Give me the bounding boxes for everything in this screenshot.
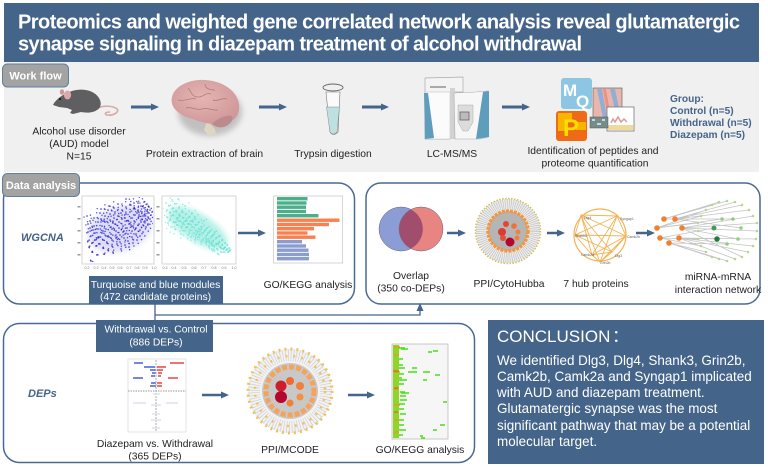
label: PPI/MCODE: PPI/MCODE xyxy=(261,445,319,456)
work flow tag: Work flow xyxy=(9,70,62,82)
icon: MaxQuant xyxy=(561,78,592,111)
chart: blue module scatter: 0.4 xyxy=(102,266,106,270)
icon: small charts xyxy=(590,107,634,131)
label: LC-MS/MS: LC-MS/MS xyxy=(427,149,477,160)
arrow xyxy=(131,106,156,108)
label: overlap: (350 co-DEPs) xyxy=(377,284,445,294)
icon: heatmap xyxy=(593,88,622,119)
text: conclusion body: Camk2b, Camk2a and Syngap1 implicated xyxy=(497,369,752,384)
connector to overlap panel xyxy=(155,304,420,320)
chart: turquoise module scatter: 0.8 xyxy=(212,266,216,270)
heading: WGCNA: WGCNA xyxy=(21,232,64,244)
chart: blue module scatter: 0.6 xyxy=(118,266,122,270)
label: miRNA-mRNA network xyxy=(675,272,762,296)
icon: MaxQuant: M xyxy=(563,81,577,100)
arrow xyxy=(447,232,463,234)
work flow tag xyxy=(2,64,68,87)
panel: WGCNA xyxy=(4,183,354,304)
chart: blue module scatter: 0.7 xyxy=(126,266,132,270)
chart: PPI network xyxy=(476,198,540,264)
chart: blue module scatter: 0.3 xyxy=(94,266,98,270)
label: GO/KEGG analysis: GO/KEGG analysis xyxy=(376,445,464,456)
chart: turquoise module scatter xyxy=(158,194,236,270)
icon: MaxQuant: Q xyxy=(576,92,589,111)
icon: mouse xyxy=(53,89,118,115)
arrow xyxy=(348,394,372,396)
callout: turquoise and blue modules: (472 candidate proteins) xyxy=(100,292,211,303)
label: GO/KEGG analysis: GO/KEGG analysis xyxy=(264,280,352,291)
chart: turquoise module scatter: 0.5 xyxy=(182,266,186,270)
icon: proteomics software collage xyxy=(556,78,634,142)
chart: hub proteins network: Camk2b xyxy=(627,235,640,239)
chart: blue module scatter xyxy=(79,193,158,270)
group legend: Withdrawal (n=5) xyxy=(670,118,752,129)
icon: Venn diagram xyxy=(379,207,443,251)
chart: hub proteins network xyxy=(574,209,640,265)
arrow xyxy=(547,232,562,234)
arrow xyxy=(362,106,386,108)
chart: hub proteins network: Syngap1 xyxy=(620,217,634,221)
title banner xyxy=(4,3,759,62)
data analysis tag: Data analysis xyxy=(6,180,76,192)
label: overlap: Overlap xyxy=(393,271,429,282)
chart: blue module scatter: 1.0 xyxy=(152,266,156,270)
label: AUD model xyxy=(32,126,126,162)
arrow xyxy=(502,106,527,108)
chart: GO/KEGG heatmap xyxy=(392,344,448,439)
label: Diazepam vs Withdrawal: Diazepam vs. Withdrawal xyxy=(97,439,213,450)
group legend: Group: xyxy=(670,94,704,105)
arrow xyxy=(636,232,652,234)
text: conclusion body: We identified Dlg3, Dlg4, Shank3, Grin2b, xyxy=(497,353,745,368)
chart: volcano plot xyxy=(128,359,186,432)
heading: conclusion: ： xyxy=(612,327,629,346)
chart: hub proteins network: Grin2b xyxy=(600,261,611,265)
callout: turquoise and blue modules xyxy=(89,276,223,304)
group legend: Control (n=5) xyxy=(670,106,734,117)
chart: hub proteins network: Camk2a xyxy=(581,253,594,257)
text: conclusion body: significant pathway that may be a potential xyxy=(497,418,750,433)
label: Withdrawal box: Withdrawal vs. Control xyxy=(104,324,208,336)
title banner: Proteomics and weighted gene correlated network analysis reveal glutamatergic xyxy=(18,12,740,34)
chart: hub proteins network: Dlg3 xyxy=(615,254,622,258)
panel: work flow xyxy=(2,62,759,172)
chart: blue module scatter: 0.8 xyxy=(134,266,140,270)
data analysis tag xyxy=(2,174,80,196)
arrow xyxy=(238,232,263,234)
chart: hub proteins network: Shank3 xyxy=(575,234,587,238)
icon: brain xyxy=(172,80,242,136)
chart: miRNA-mRNA network xyxy=(654,201,757,261)
icon: Perseus: P xyxy=(563,115,579,142)
chart: blue module scatter: 0.9 xyxy=(142,266,148,270)
chart: turquoise module scatter: 0.9 xyxy=(222,266,226,270)
arrow xyxy=(202,394,226,396)
chart: blue module scatter: 0.5 xyxy=(110,266,114,270)
group legend: Diazepam (n=5) xyxy=(670,130,745,141)
chart: turquoise module scatter: 0.4 xyxy=(172,266,176,270)
label: miRNA-mRNA network: miRNA-mRNA xyxy=(685,272,751,283)
chart: turquoise module scatter: 1.0 xyxy=(232,266,236,270)
chart: GO/KEGG bars xyxy=(274,196,342,263)
label: Withdrawal box: (886 DEPs) xyxy=(129,338,183,348)
chart: turquoise module scatter: 0.3 xyxy=(162,266,168,270)
heading: DEPs: DEPs xyxy=(28,388,57,400)
chart: PPI/MCODE network xyxy=(248,349,332,433)
icon: mass spectrometer xyxy=(424,77,489,139)
text: conclusion body: molecular target. xyxy=(497,434,597,449)
label: overlap xyxy=(377,271,445,294)
label: Diazepam vs Withdrawal: (365 DEPs) xyxy=(128,452,182,462)
label: miRNA-mRNA network: interaction network xyxy=(675,285,762,296)
panel: DEPs xyxy=(4,320,474,462)
title banner: synapse signaling in diazepam treatment of alcohol withdrawal xyxy=(18,34,582,56)
heading: conclusion: CONCLUSION xyxy=(497,327,610,346)
label: PPI/CytoHubba: PPI/CytoHubba xyxy=(474,279,545,290)
text: conclusion body: Glutamatergic synapse was the most xyxy=(497,401,718,416)
panel: overlap and network xyxy=(366,183,762,304)
arrow xyxy=(259,106,284,108)
label: protein extraction: Protein extraction of brain xyxy=(146,149,263,160)
label: AUD model: Alcohol use disorder xyxy=(32,126,126,138)
chart: hub proteins network: Dlg4 xyxy=(584,216,591,220)
label: identification: proteome quantification xyxy=(541,158,649,170)
conclusion panel xyxy=(488,320,764,464)
label: Withdrawal box xyxy=(96,320,213,352)
chart: turquoise module scatter: 0.6 xyxy=(192,266,196,270)
chart: blue module scatter: 0.2 xyxy=(84,266,90,270)
label: Diazepam vs Withdrawal xyxy=(97,439,213,462)
label: identification xyxy=(527,146,659,170)
chart: turquoise module scatter: 0.7 xyxy=(202,266,206,270)
label: trypsin: Trypsin digestion xyxy=(294,149,372,160)
label: identification: Identification of peptides and xyxy=(527,146,659,157)
text: conclusion body xyxy=(496,353,752,449)
label: AUD model: N=15 xyxy=(67,152,92,162)
icon: tube xyxy=(323,84,343,134)
text: conclusion body: with AUD and diazepam treatment. xyxy=(496,385,705,400)
callout: turquoise and blue modules: Turquoise and blue modules xyxy=(91,280,220,291)
group legend xyxy=(670,94,752,141)
label: AUD model: (AUD) model xyxy=(49,139,109,150)
label: hub proteins: 7 hub proteins xyxy=(563,279,629,290)
